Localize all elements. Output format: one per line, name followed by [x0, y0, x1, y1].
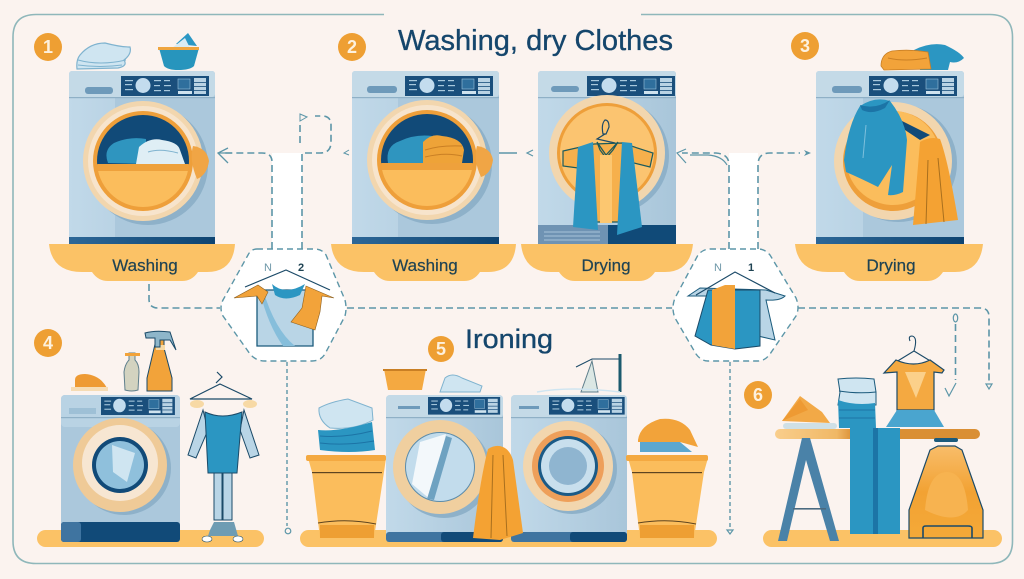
icon: left hamper and stack	[306, 399, 386, 538]
badge 2: 2	[347, 37, 357, 57]
icon: hanging shirt	[884, 336, 944, 427]
dryer door	[549, 95, 669, 214]
node label N: N	[714, 262, 722, 274]
badge 4: 4	[43, 333, 53, 353]
washer body	[61, 395, 180, 542]
badge 4	[34, 329, 62, 357]
washer door	[83, 101, 209, 225]
icon: A-frame leg	[778, 438, 839, 541]
title: Washing, dry Clothes	[398, 25, 673, 57]
panel: step 5 machines and hampers	[300, 354, 717, 547]
panel: step 3 drying	[795, 44, 983, 281]
heading: Ironing: Ironing	[465, 324, 553, 354]
node label 1: 1	[748, 262, 754, 274]
icon: blue jacket	[844, 99, 907, 195]
label plate: Washing	[112, 256, 178, 275]
label plate	[795, 244, 983, 281]
panel: step 4 washer and bottles	[37, 331, 264, 547]
icon: orange garment	[913, 138, 958, 225]
label plate	[331, 244, 516, 281]
washer body	[352, 71, 499, 244]
icon: iron	[71, 374, 108, 391]
icon: iron base	[909, 438, 983, 538]
icon: blue cloth	[850, 428, 900, 534]
badge 1: 1	[43, 37, 53, 57]
washer body	[69, 71, 215, 244]
node label N: N	[264, 262, 272, 274]
icon: iron stand	[537, 354, 620, 392]
label plate: Drying	[866, 256, 916, 275]
hanging shirt	[563, 120, 653, 235]
panel: step 2 drying machine	[521, 71, 693, 281]
icon: folded laundry	[881, 44, 964, 70]
icon: hanger with clothes	[688, 272, 785, 349]
dryer body	[538, 71, 676, 244]
panel: step 1 washer	[49, 33, 235, 281]
washer door right	[523, 421, 617, 514]
icon: hanging outfit	[188, 372, 259, 542]
badge 5	[428, 336, 454, 362]
node label 2: 2	[298, 262, 304, 274]
node: left hanger	[221, 249, 346, 361]
icon: stacked clothes	[838, 378, 876, 428]
washer door	[367, 100, 493, 224]
icon: spray bottle	[145, 331, 176, 391]
label plate	[49, 244, 235, 281]
label plate	[521, 244, 693, 281]
label plate: Drying	[581, 256, 631, 275]
icon: small bottle	[124, 353, 140, 391]
icon: folded cloth	[440, 375, 482, 392]
ground	[300, 530, 717, 547]
panel: step 6 ironing table	[763, 336, 1002, 547]
washer body	[816, 71, 964, 244]
badge 2	[338, 33, 366, 61]
badge 1	[34, 33, 62, 61]
badge 3: 3	[800, 36, 810, 56]
ground	[763, 530, 1002, 547]
washer door	[73, 418, 171, 515]
connector strips	[272, 153, 758, 250]
washer door left	[393, 420, 491, 518]
washer body left	[386, 395, 503, 542]
icon: hanger with shirt	[234, 270, 334, 346]
badge 6: 6	[753, 385, 763, 405]
washer door	[834, 102, 957, 222]
badge 6	[744, 381, 772, 409]
icon: folded cloth	[77, 43, 130, 69]
panel: step 2 washer	[331, 71, 516, 281]
icon: iron	[782, 396, 837, 429]
icon: right hamper and stack	[626, 419, 708, 538]
connector arrows	[149, 114, 992, 534]
node: right hanger	[673, 249, 798, 361]
icon: table top	[775, 429, 980, 439]
ground	[37, 530, 264, 547]
washer body right	[511, 395, 627, 542]
icon: basin	[158, 33, 199, 70]
label plate: Washing	[392, 256, 458, 275]
icon: basin	[383, 369, 427, 390]
badge 3	[791, 32, 819, 60]
icon: orange garment	[473, 446, 523, 540]
badge 5: 5	[436, 339, 446, 359]
